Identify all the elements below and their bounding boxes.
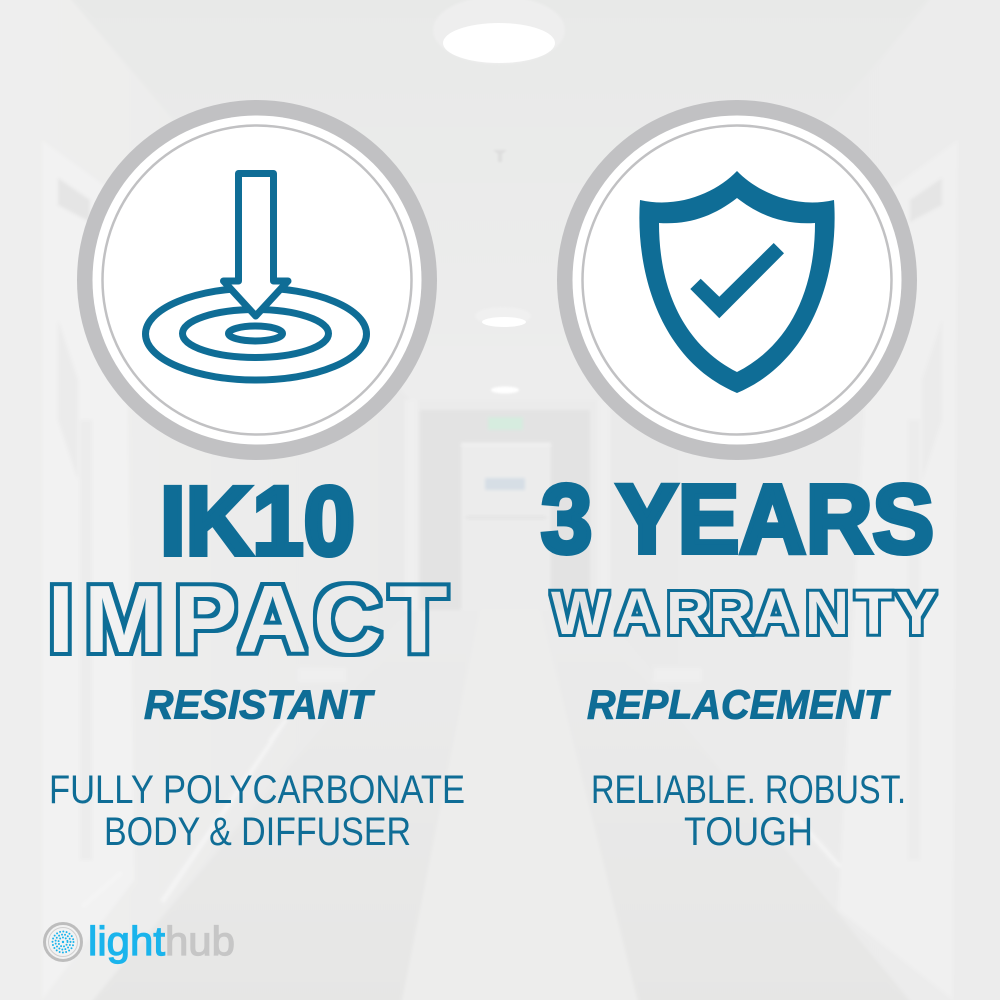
heading: IK10: IK10 [160,466,355,576]
ceiling lights [433,0,565,394]
description: reliable robust tough [591,768,906,854]
logo mark: dotted circle [44,924,82,960]
icon: shield with check mark [639,171,835,393]
subheading: RESISTANT: RESISTANT [144,682,375,728]
description: reliable robust tough: RELIABLE. ROBUST. [591,768,906,812]
description: polycarbonate body: FULLY POLYCARBONATE [49,768,465,812]
left column: IK10 impact [48,100,465,854]
heading: 3 YEARS: 3 YEARS [541,464,934,574]
subheading: REPLACEMENT: REPLACEMENT [587,682,891,728]
icon: arrow striking target [146,174,366,380]
outlined heading: WARRANTY: WARRANTY [551,579,937,647]
outlined heading: IMPACT: IMPACT [48,566,448,673]
lighthub logo [44,918,235,964]
right circle badge [557,100,917,460]
logo wordmark: lighthub [88,918,235,964]
description: reliable robust tough: TOUGH [684,810,813,854]
description: polycarbonate body [49,768,465,854]
description: polycarbonate body: BODY & DIFFUSER [104,810,411,854]
right column: 3 years warranty [541,100,937,854]
left circle badge [77,100,437,460]
